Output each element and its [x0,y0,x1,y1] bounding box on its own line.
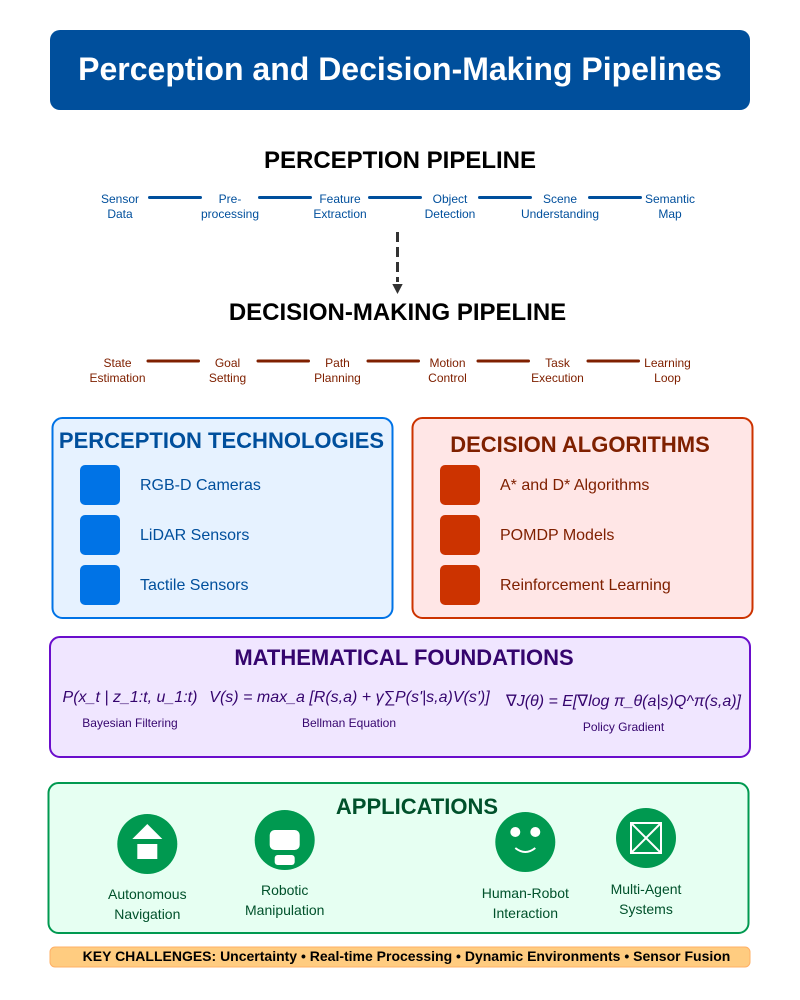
formula: policy gradient: ∇J(θ) = E[∇log π_θ(a|s)Q^π(s,a)] [505,693,742,710]
heading: perception pipeline: PERCEPTION PIPELINE [264,147,536,174]
arrow: perception to decision [392,232,403,294]
perception pipeline flow: Object [433,192,468,206]
decision pipeline flow: Execution [531,371,584,385]
decision pipeline flow: Estimation [89,371,146,385]
label: robotic manipulation [245,882,324,918]
decision pipeline flow: Goal [215,356,240,370]
perception pipeline flow [101,192,695,221]
label: autonomous navigation: Autonomous [108,886,187,902]
icon: autonomous navigation [117,814,177,874]
decision pipeline flow: Loop [654,371,681,385]
decision pipeline flow: Learning [644,356,691,370]
panel: perception technologies [52,418,392,618]
label: RGB-D cameras: RGB-D Cameras [140,477,261,494]
label: POMDP: POMDP Models [500,527,614,544]
label: robotic manipulation: Manipulation [245,902,324,918]
label: multi-agent systems [611,881,682,917]
decision pipeline flow: State [103,356,132,370]
perception pipeline flow: Semantic [645,192,695,206]
label: human-robot interaction: Interaction [493,905,558,921]
icon: multi-agent systems [616,808,676,868]
formula: bayesian filtering: P(x_t | z_1:t, u_1:t) [63,689,197,706]
panel: applications [48,783,748,933]
decision pipeline flow: Control [428,371,467,385]
formula: bellman equation: V(s) = max_a [R(s,a) + γ∑P(s'|s,a)V(s')] [209,689,490,706]
heading: mathematical foundations: MATHEMATICAL FOUNDATIONS [234,645,574,670]
icon: POMDP [440,515,480,555]
decision pipeline flow: Motion [429,356,466,370]
label: multi-agent systems: Multi-Agent [611,881,682,897]
icon: tactile sensors [80,565,120,605]
perception pipeline flow: Pre- [219,192,241,206]
icon: robotic manipulation [255,810,315,870]
heading: perception technologies: PERCEPTION TECHNOLOGIES [59,428,384,453]
label: autonomous navigation [108,886,187,922]
icon: human-robot interaction [495,812,555,872]
decision pipeline flow: Path [325,356,350,370]
label: A* and D*: A* and D* Algorithms [500,477,649,494]
label: multi-agent systems: Systems [619,901,673,917]
icon: reinforcement learning [440,565,480,605]
perception pipeline flow: Data [107,207,133,221]
perception pipeline flow: Map [658,207,682,221]
label: reinforcement learning: Reinforcement Learning [500,577,671,594]
heading: applications: APPLICATIONS [336,794,498,819]
heading: decision-making pipeline: DECISION-MAKING PIPELINE [229,299,566,326]
panel: decision algorithms [412,418,752,618]
icon: LiDAR sensors [80,515,120,555]
formula: policy gradient [505,693,742,734]
decision pipeline flow [89,356,691,385]
label: robotic manipulation: Robotic [261,882,308,898]
formula: bayesian filtering: Bayesian Filtering [82,716,178,730]
title [50,30,750,110]
icon: RGB-D cameras [80,465,120,505]
title: Perception and Decision-Making Pipelines [78,51,722,87]
formula: bayesian filtering [63,689,197,730]
perception pipeline flow: Extraction [313,207,367,221]
label: human-robot interaction [482,885,569,921]
callout: key challenges: KEY CHALLENGES: Uncertainty • Real-time Processing • Dynamic Environments • Sensor Fusion [83,948,730,964]
label: autonomous navigation: Navigation [114,906,180,922]
label: LiDAR sensors: LiDAR Sensors [140,527,249,544]
formula: policy gradient: Policy Gradient [583,720,665,734]
perception pipeline flow: Understanding [521,207,599,221]
perception pipeline flow: processing [201,207,259,221]
heading: decision algorithms: DECISION ALGORITHMS [450,432,710,457]
label: tactile sensors: Tactile Sensors [140,577,248,594]
formula: bellman equation: Bellman Equation [302,716,396,730]
formula: bellman equation [209,689,490,730]
decision pipeline flow: Task [545,356,571,370]
label: human-robot interaction: Human-Robot [482,885,569,901]
perception pipeline flow: Sensor [101,192,139,206]
perception pipeline flow: Scene [543,192,577,206]
decision pipeline flow: Planning [314,371,361,385]
perception pipeline flow: Detection [425,207,475,221]
perception pipeline flow: Feature [319,192,361,206]
icon: A* and D* [440,465,480,505]
decision pipeline flow: Setting [209,371,246,385]
panel: mathematical foundations [50,637,750,757]
